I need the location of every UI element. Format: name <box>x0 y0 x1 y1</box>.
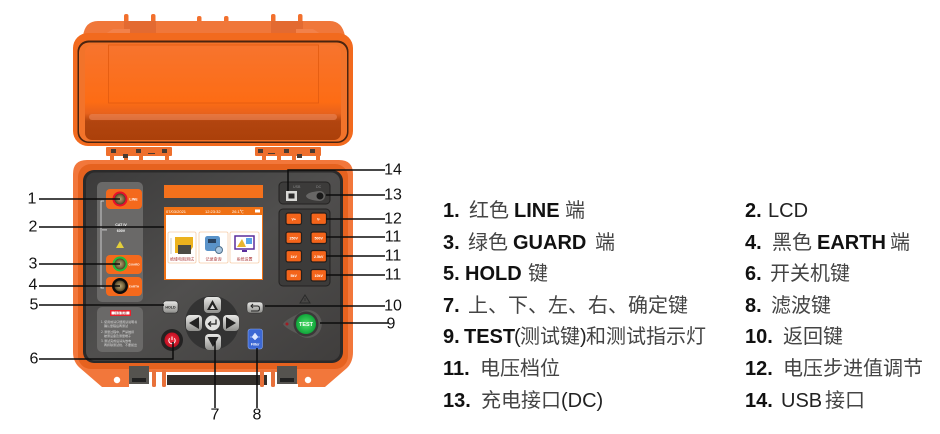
safety notice panel: 3. 测试完成后请先放电 <box>101 338 131 343</box>
status bar: 26.1℃ <box>232 209 244 214</box>
HOLD key: HOLD <box>165 306 176 310</box>
legend item 4: 黑色 <box>772 226 812 255</box>
return key <box>247 302 263 313</box>
leader lines and callout numbers: 8 <box>253 406 262 424</box>
TEST key and indicator lamp <box>283 310 322 338</box>
legend item 6: 6. <box>745 263 762 285</box>
legend item 5: 5. <box>443 263 460 285</box>
voltage range buttons: 1kV <box>290 255 297 259</box>
icon: DC port <box>306 191 325 201</box>
case latches and bottom strip <box>129 366 297 387</box>
leader lines and callout numbers: 7 <box>211 406 220 424</box>
safety notice panel: 注意事项 <box>114 310 128 315</box>
legend item 13: (DC) <box>561 390 603 412</box>
legend item 2: LCD <box>768 200 808 222</box>
legend item 11: 11. <box>443 358 470 380</box>
leader lines and callout numbers: 13 <box>384 186 402 204</box>
leader lines and callout numbers: 11 <box>385 248 401 264</box>
leader lines and callout numbers: 9 <box>387 316 396 332</box>
terminal column <box>97 182 143 302</box>
legend item 4: EARTH <box>817 232 886 254</box>
legend item 10: 10. <box>745 326 773 348</box>
legend item 1 <box>443 194 585 223</box>
leader lines and callout numbers: 10 <box>384 298 402 314</box>
legend item 14 <box>745 384 865 413</box>
legend item 4: 4. <box>745 232 762 254</box>
step buttons <box>286 213 326 224</box>
safety notice panel: 确认量程后再测试 <box>104 323 128 328</box>
lid hinges <box>106 147 321 161</box>
legend item 4: 端 <box>890 226 910 255</box>
down key <box>205 334 221 350</box>
USB and DC port box: USB <box>293 185 301 189</box>
app card: records: 记录查询 <box>206 256 222 262</box>
safety notice panel: 再拆除测试线，不要拔出 <box>104 342 137 347</box>
legend item 8: 8. <box>745 295 762 317</box>
legend item 4 <box>745 226 910 255</box>
legend item 3: 绿色 <box>468 226 508 255</box>
legend: left column <box>443 194 706 413</box>
rating text: CAT IV <box>115 223 127 227</box>
legend item 7: 7. <box>443 295 460 317</box>
front panel <box>83 170 343 363</box>
app card: insulation test: 绝缘电阻测试 <box>170 256 194 262</box>
leader lines and callout numbers: 14 <box>384 162 402 178</box>
legend item 11 <box>443 352 560 381</box>
warning triangle <box>116 241 124 248</box>
leader lines and callout numbers: 4 <box>29 276 38 294</box>
GUARD terminal: GUARD <box>128 262 140 266</box>
status bar <box>166 209 260 214</box>
legend item 8: 滤波键 <box>771 289 831 318</box>
legend item 5: HOLD <box>465 263 522 285</box>
enter key <box>205 316 220 330</box>
HOLD key <box>163 301 178 313</box>
legend item 2 <box>745 200 808 222</box>
filter key: Filter <box>251 342 260 346</box>
leader lines and callout numbers <box>28 162 402 424</box>
voltage button box <box>279 209 330 286</box>
legend item 13: 13. <box>443 390 471 412</box>
right key <box>223 315 239 331</box>
legend item 7: 上、下、左、右、确定键 <box>468 289 688 318</box>
legend item 2: 2. <box>745 200 762 222</box>
status bar: 12:23:32 <box>205 209 221 214</box>
LCD screen <box>164 207 263 280</box>
leader lines and callout numbers: 3 <box>29 256 38 272</box>
up key <box>204 297 221 313</box>
step buttons: V- <box>317 217 321 221</box>
legend item 11: 电压档位 <box>480 352 560 381</box>
legend item 3: GUARD <box>513 232 586 254</box>
case body <box>73 160 353 387</box>
legend item 12: 电压步进值调节 <box>783 352 923 381</box>
voltage range buttons: 5kV <box>290 274 297 278</box>
step buttons: V+ <box>291 217 296 221</box>
EARTH terminal: EARTH <box>129 284 139 288</box>
legend item 5 <box>443 257 548 286</box>
legend item 13 <box>443 384 603 413</box>
leader lines and callout numbers: 11 <box>385 228 401 246</box>
direction pad <box>185 296 239 350</box>
TEST key and indicator lamp: TEST <box>299 322 314 328</box>
top orange strip <box>164 185 263 198</box>
filter key <box>248 329 262 349</box>
legend item 14: 14. <box>745 390 773 412</box>
leader lines and callout numbers: 2 <box>29 218 38 236</box>
legend item 13: 充电接口 <box>481 384 561 413</box>
leader lines and callout numbers: 11 <box>385 266 401 284</box>
legend: right column <box>745 200 923 413</box>
voltage range buttons: 500V <box>314 236 323 240</box>
legend item 1: 1. <box>443 200 460 222</box>
legend item 9 <box>443 320 706 349</box>
voltage range buttons: 2.5kV <box>314 255 324 259</box>
legend item 9: ) <box>580 326 587 348</box>
terminal column: 600V <box>117 229 126 233</box>
legend item 1: LINE <box>514 200 560 222</box>
legend item 14: 接口 <box>825 384 865 413</box>
app card: settings: 系统设置 <box>236 256 252 262</box>
status bar: 07/03/2021 <box>166 209 187 214</box>
legend item 9: TEST <box>464 326 515 348</box>
warning mark <box>300 295 310 303</box>
safety notice panel <box>97 307 143 352</box>
safety notice panel: 1. 使用前请仔细阅读说明书 <box>101 319 137 324</box>
voltage range buttons: 250V <box>289 236 298 240</box>
open case lid <box>73 14 353 161</box>
legend item 9: ( <box>514 326 521 348</box>
legend item 8 <box>745 289 831 318</box>
legend item 10: 返回键 <box>783 320 843 349</box>
legend item 14: USB <box>781 390 822 412</box>
legend item 12: 12. <box>745 358 773 380</box>
legend item 5: 键 <box>528 257 548 286</box>
power key <box>161 329 183 351</box>
leader lines and callout numbers: 5 <box>30 296 39 314</box>
USB and DC port box <box>279 182 330 204</box>
leader lines and callout numbers: 12 <box>384 210 402 228</box>
voltage range buttons: 10kV <box>314 274 323 278</box>
voltage range buttons <box>286 232 326 281</box>
legend item 1: 端 <box>565 194 585 223</box>
legend item 9: 和测试指示灯 <box>586 320 706 349</box>
leader lines and callout numbers: 6 <box>30 350 39 368</box>
safety notice panel: 被测设备及测量端子 <box>104 333 131 338</box>
left key <box>186 315 202 331</box>
legend item 3 <box>443 226 615 255</box>
legend item 3: 3. <box>443 232 460 254</box>
legend item 9: 测试键 <box>520 320 580 349</box>
legend item 9: 9. <box>443 326 460 348</box>
legend item 1: 红色 <box>469 194 509 223</box>
safety notice panel: 2. 测量过程中，严禁触摸 <box>101 329 134 334</box>
leader lines and callout numbers: 1 <box>28 190 37 208</box>
legend item 6: 开关机键 <box>770 257 850 286</box>
LINE terminal: LINE <box>129 198 138 202</box>
icon: USB port <box>286 191 297 201</box>
legend item 3: 端 <box>595 226 615 255</box>
USB and DC port box: DC <box>316 185 322 189</box>
legend item 10 <box>745 320 843 349</box>
